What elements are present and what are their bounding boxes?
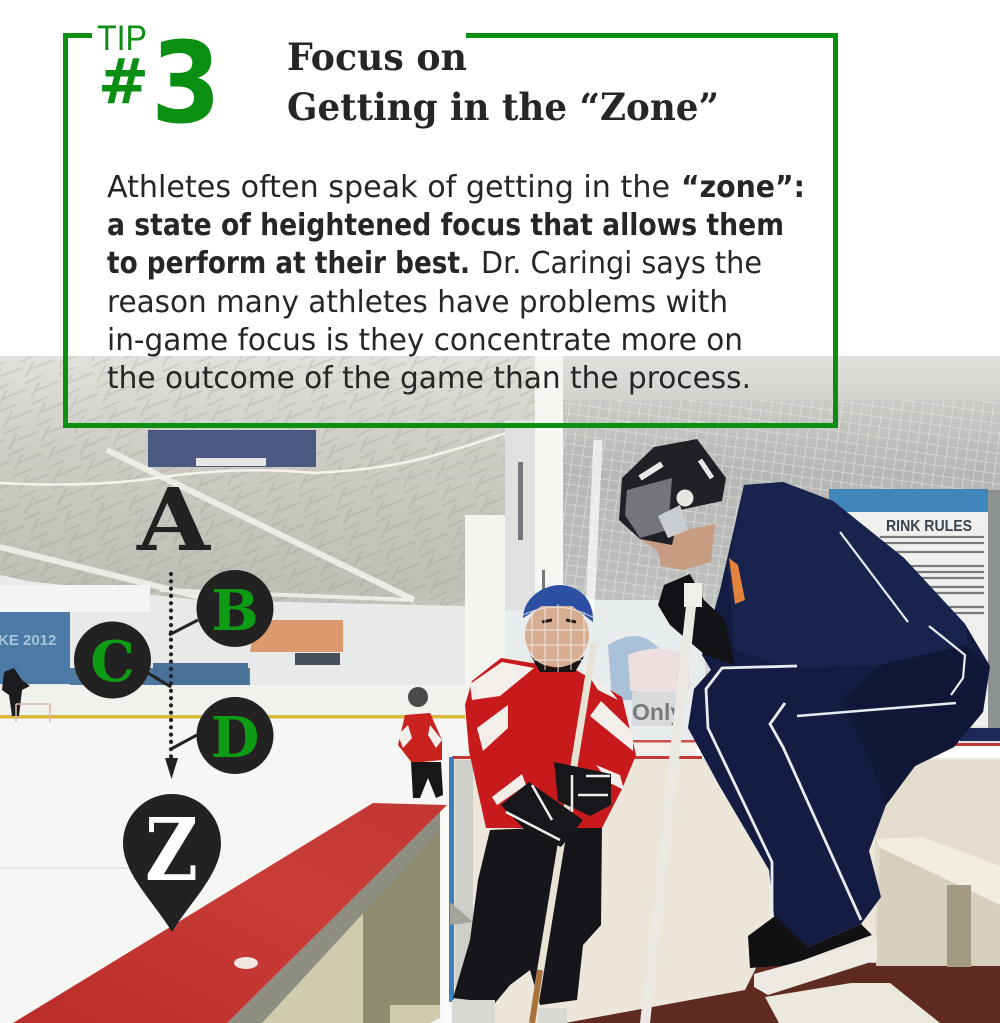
badge B: B [211,578,259,644]
arena columns [465,356,598,715]
body text block: Dr. Caringi says the [481,246,762,281]
heading [287,35,719,129]
body text block: the outcome of the game than the process. [107,361,751,396]
dotted arrow [165,574,178,779]
badge D: D [211,705,259,771]
badge: tip number: TIP [97,19,147,58]
white step [765,983,940,1023]
heading: Getting in the “Zone” [287,85,719,129]
body text block: Athletes often speak of getting in the [107,170,670,205]
pants [453,825,602,1005]
map pin Z [123,794,221,932]
face [640,524,715,570]
map pin Z: Z [145,800,198,901]
body text block: a state of heightened focus that allows them [107,208,784,243]
stick [640,606,696,1023]
badge: tip number [97,19,221,149]
skate boot [748,916,872,968]
far wall and windows [0,578,465,690]
net backdrop [505,356,1000,746]
panel: tip frame [66,36,836,426]
skates [452,1000,567,1023]
heading: Focus on [287,35,467,79]
team bench [874,760,1000,967]
body text block: to perform at their best. [107,246,470,281]
small skater [398,687,443,798]
net backdrop: Only [632,699,683,725]
helmet and face [525,603,589,667]
jersey [465,658,636,828]
rink rules sign [829,489,1000,741]
piping [706,532,965,920]
scoreboard [148,430,316,467]
badge: tip number: 3 [151,19,221,149]
connectors [148,620,198,749]
body text block [107,170,805,396]
coach [619,439,990,1023]
gloves [501,782,583,847]
logo [729,558,745,604]
child player [452,585,636,1023]
rink ice [0,685,470,1023]
letter A: A [136,470,211,571]
helmet [619,439,726,545]
badge: tip number: # [98,45,149,118]
diagram: A to Z path [74,470,274,932]
rink rules sign: RINK RULES [886,518,972,535]
badge C: C [90,629,135,695]
body text block: reason many athletes have problems with [107,285,728,320]
ceiling beams [0,450,414,620]
front board with red rail [13,803,473,1023]
jacket and trousers [688,482,990,947]
far official [2,668,50,722]
body text block: in-game focus is they concentrate more on [107,323,743,358]
skate blade [754,940,877,995]
bench boards [445,740,1000,1023]
badge D [196,697,274,774]
panel: arena photo background [0,356,1000,1023]
glove [658,574,735,665]
badge B [196,570,274,647]
rope [0,430,514,485]
badge C [74,622,151,698]
body text block: “zone”: [681,170,805,205]
stick [532,643,594,1023]
